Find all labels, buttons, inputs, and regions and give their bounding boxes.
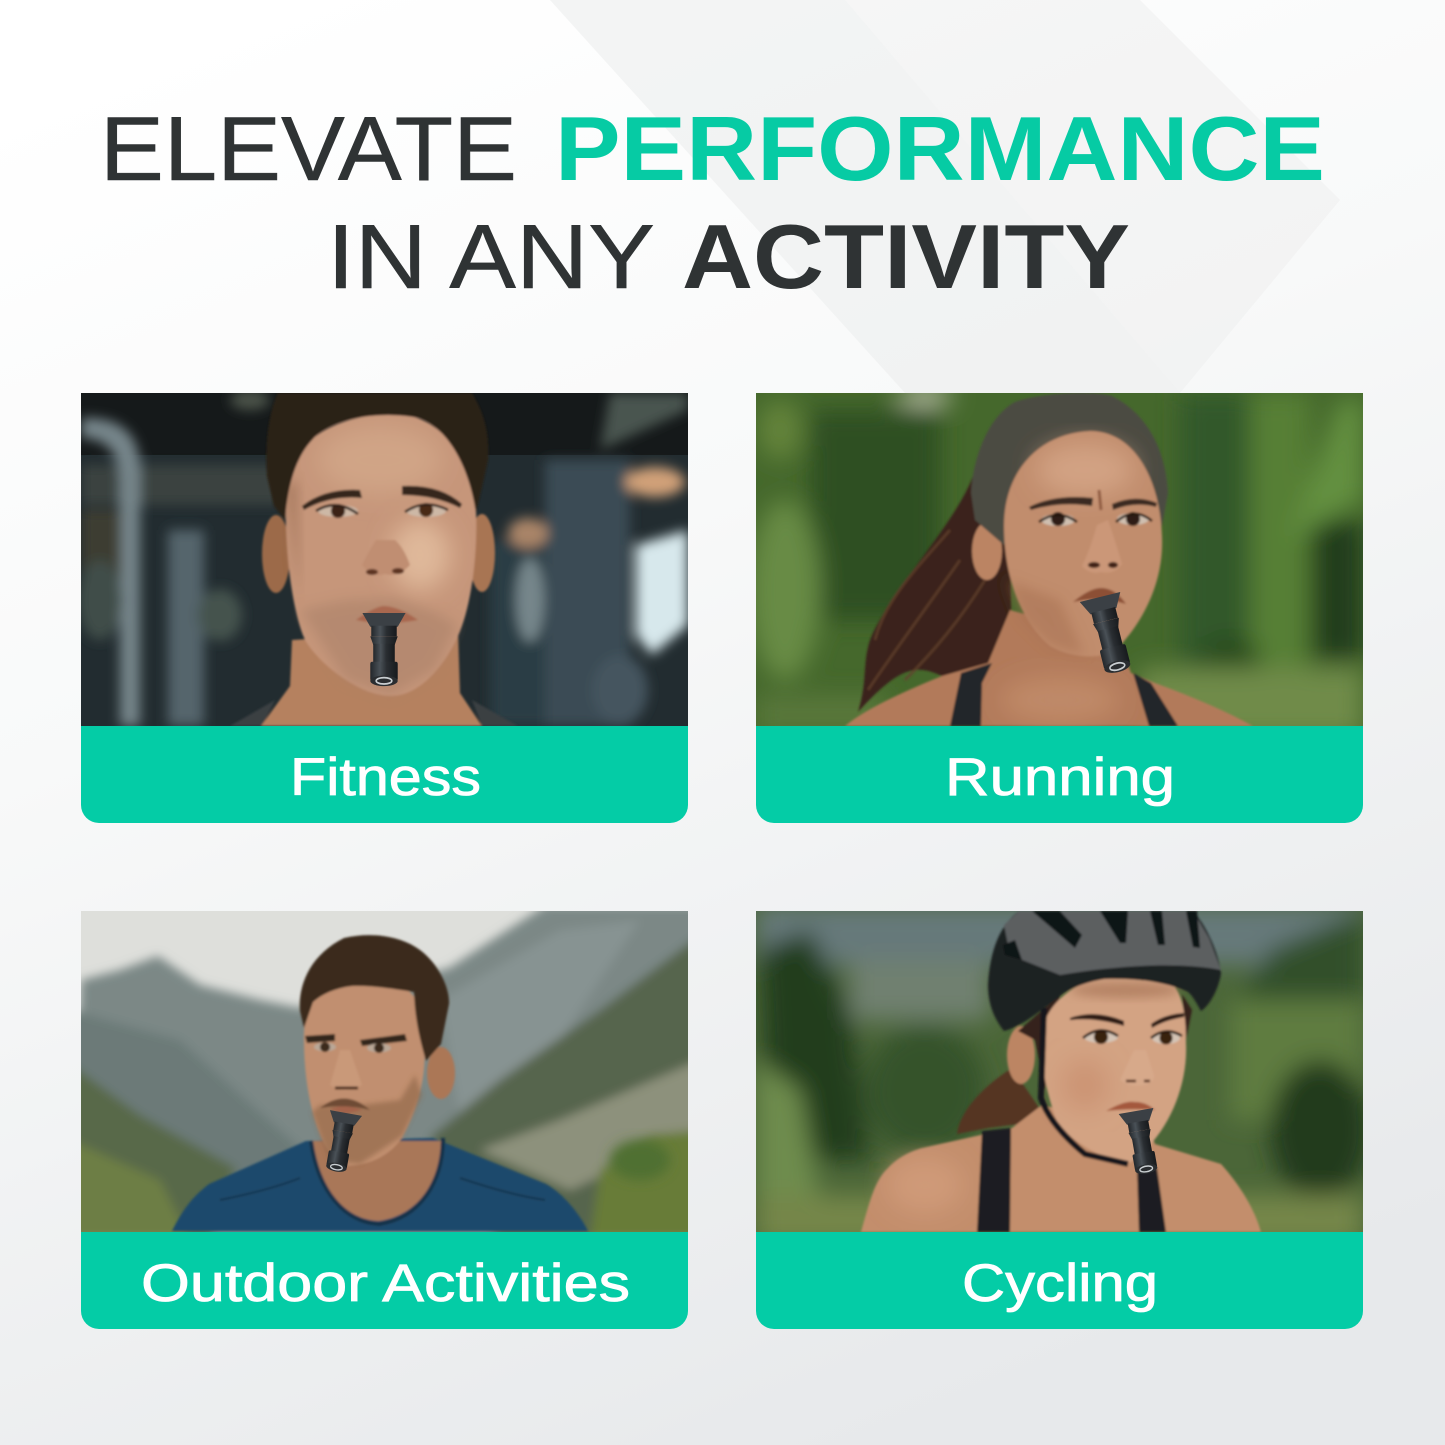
label bar: Running: Running (945, 748, 1175, 807)
face (1004, 431, 1162, 656)
eyes (1039, 512, 1152, 526)
t-shirt (172, 1138, 588, 1231)
chin strap (1041, 1008, 1128, 1164)
ears (262, 515, 290, 593)
hair (300, 935, 449, 1061)
face (1042, 972, 1186, 1164)
woman figure (845, 393, 1253, 726)
hair behind face (1018, 994, 1192, 1090)
man figure (172, 935, 588, 1231)
title line 1: Elevate Performance: ELEVATE (100, 99, 517, 200)
ear (972, 522, 1002, 580)
ear (1007, 1026, 1035, 1084)
label bar: Running (756, 726, 1363, 823)
title (100, 99, 1325, 308)
photo: man in gym (78, 390, 688, 726)
icon: breathing device (362, 613, 406, 686)
tank top straps (950, 663, 1178, 726)
photo: woman running (750, 388, 1363, 738)
eyes (316, 503, 448, 518)
label bar: Fitness: Fitness (290, 748, 481, 807)
hair (266, 393, 488, 520)
ear (427, 1047, 455, 1099)
photo: man in mountains (70, 905, 700, 1240)
face (304, 978, 425, 1166)
lips (1106, 1102, 1155, 1111)
label bar: Outdoor Activities: Outdoor Activities (141, 1254, 630, 1313)
woman figure (861, 911, 1261, 1232)
right green slope (429, 935, 700, 1240)
neck (261, 630, 482, 726)
helmet (988, 911, 1221, 1031)
title line 2: In Any Activity: ACTIVITY (682, 207, 1130, 308)
brows (302, 486, 462, 510)
lips (356, 606, 418, 623)
distant mountains (70, 905, 700, 1240)
photo: woman in cycling helmet (756, 905, 1370, 1245)
label bar: Fitness (81, 726, 688, 823)
brows (305, 1034, 407, 1046)
shoulders and chest (861, 1105, 1261, 1232)
nose (1084, 522, 1121, 572)
tank top straps (977, 1128, 1166, 1232)
hair (971, 393, 1168, 545)
eyes (1083, 1030, 1182, 1044)
panel: running (750, 388, 1363, 823)
label bar: Cycling: Cycling (962, 1254, 1158, 1313)
icon: breathing device (320, 1110, 362, 1174)
nose (362, 540, 410, 575)
left green slope (81, 1068, 237, 1232)
title line 1: Elevate Performance: PERFORMANCE (555, 99, 1325, 200)
eyes (314, 1042, 391, 1053)
title line 2: In Any Activity: IN ANY (327, 207, 655, 308)
shirt (230, 700, 518, 726)
panel: fitness (78, 390, 688, 823)
icon: breathing device (1119, 1108, 1164, 1177)
face (286, 413, 476, 696)
label bar: Cycling (756, 1232, 1363, 1329)
moustache and lips (320, 1098, 370, 1110)
brows (1029, 497, 1157, 510)
lips (1073, 588, 1126, 604)
shoulders and neck (845, 610, 1253, 726)
title line 2: In Any Activity (327, 207, 1130, 308)
nose (1120, 1050, 1154, 1086)
label bar: Outdoor Activities (81, 1232, 688, 1329)
panel: outdoor activities (70, 905, 700, 1329)
ponytail (858, 476, 1012, 712)
panel: cycling (756, 905, 1370, 1329)
icon: breathing device (1080, 592, 1130, 673)
brows (1070, 1013, 1184, 1028)
man figure (230, 393, 518, 726)
neck (313, 1141, 441, 1221)
ponytail (957, 1068, 1042, 1134)
nose (330, 1050, 362, 1090)
title line 1: Elevate Performance (100, 99, 1325, 200)
